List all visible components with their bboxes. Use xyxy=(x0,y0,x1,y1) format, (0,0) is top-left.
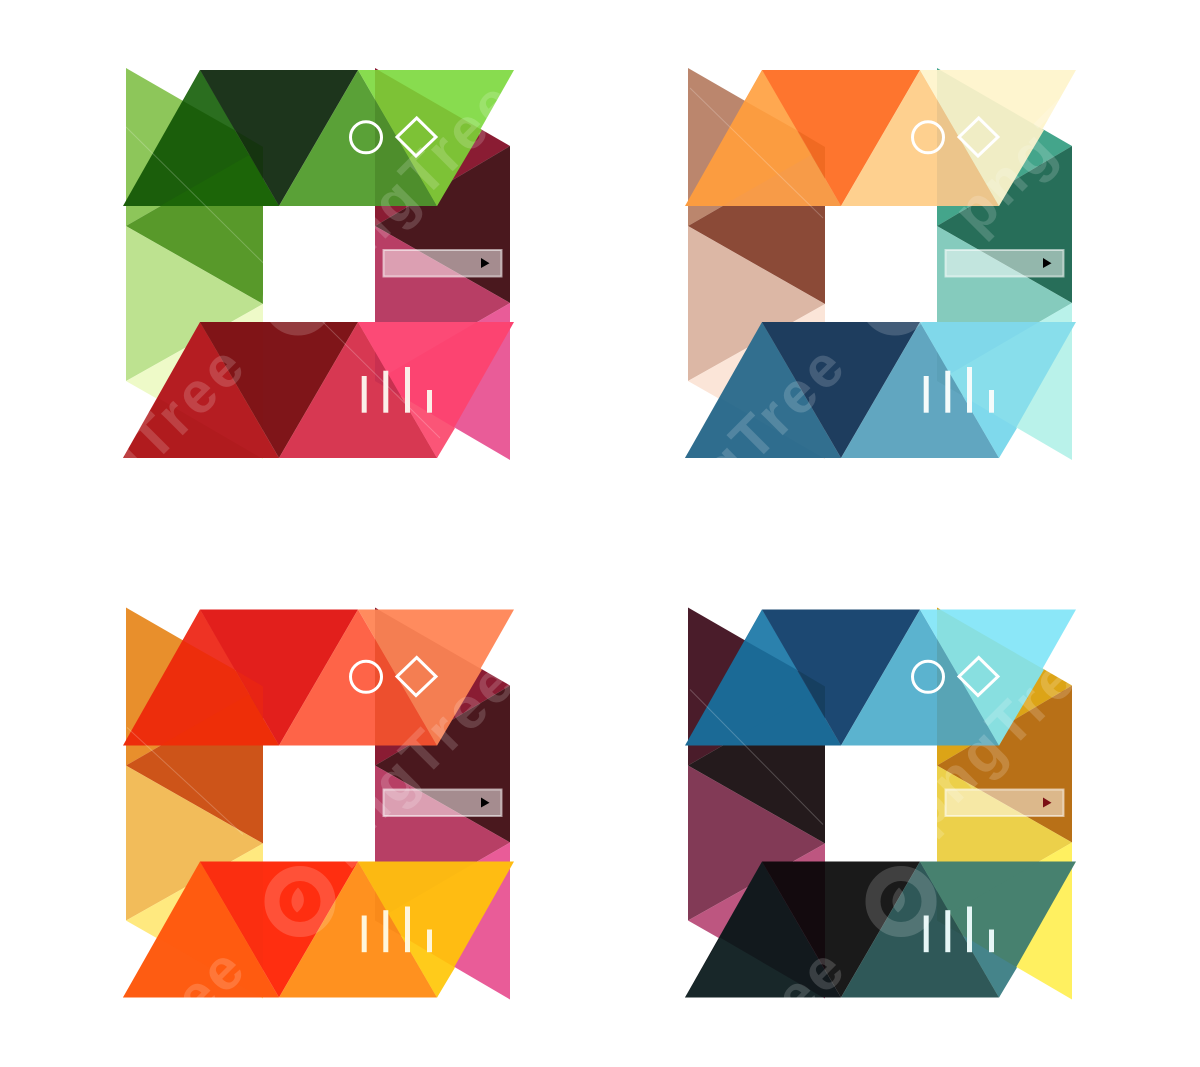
top triangle band xyxy=(123,70,514,206)
panel: orange and teal template xyxy=(634,20,1166,557)
icon: diamond xyxy=(959,658,998,696)
left folded strip xyxy=(688,608,825,998)
icon: circle xyxy=(350,122,382,153)
top triangle band xyxy=(685,610,1076,746)
icon: diamond xyxy=(397,118,436,156)
bottom triangle band xyxy=(685,862,1076,998)
right folded strip xyxy=(937,608,1072,1000)
icon: circle xyxy=(350,661,382,692)
right folded strip xyxy=(937,68,1072,460)
watermark text xyxy=(762,618,1116,1031)
watermark text: pngTree xyxy=(941,20,1166,246)
button with arrow xyxy=(384,250,502,276)
top triangle band xyxy=(685,70,1076,206)
watermark text xyxy=(634,20,1166,557)
icon: bar chart xyxy=(362,367,432,413)
watermark text xyxy=(34,67,529,557)
button with arrow xyxy=(384,790,502,816)
icon: diamond xyxy=(397,658,436,696)
watermark text: pngTree xyxy=(634,331,859,557)
panel: navy and gold template xyxy=(685,608,1116,1031)
left folded strip xyxy=(126,608,263,998)
watermark text xyxy=(162,647,529,1031)
icon: diamond xyxy=(959,118,998,156)
icon: circle xyxy=(912,661,944,692)
right folded strip xyxy=(375,608,510,1000)
watermark text: pngTree xyxy=(891,618,1116,843)
watermark logo xyxy=(867,272,923,328)
watermark text: pngTree xyxy=(304,647,529,872)
right folded strip xyxy=(375,68,510,460)
watermark text: ee xyxy=(162,934,259,1031)
watermark logo xyxy=(873,874,929,930)
button with arrow xyxy=(946,250,1064,276)
button with arrow xyxy=(946,790,1064,816)
bottom triangle band xyxy=(123,322,514,458)
watermark logo xyxy=(272,874,328,930)
top triangle band xyxy=(123,610,514,746)
panel: green and crimson template xyxy=(34,67,529,557)
bottom triangle band xyxy=(123,862,514,998)
icon: bar chart xyxy=(924,367,994,413)
watermark text: pngTree xyxy=(34,331,259,557)
panel: red and amber template xyxy=(123,608,529,1031)
icon: circle xyxy=(912,122,944,153)
watermark text: ee xyxy=(762,934,859,1031)
icon: bar chart xyxy=(924,906,994,952)
icon: bar chart xyxy=(362,906,432,952)
bottom triangle band xyxy=(685,322,1076,458)
left folded strip xyxy=(688,68,825,459)
watermark text: pngTree xyxy=(304,67,529,293)
left folded strip xyxy=(126,68,263,459)
watermark logo xyxy=(270,272,326,328)
